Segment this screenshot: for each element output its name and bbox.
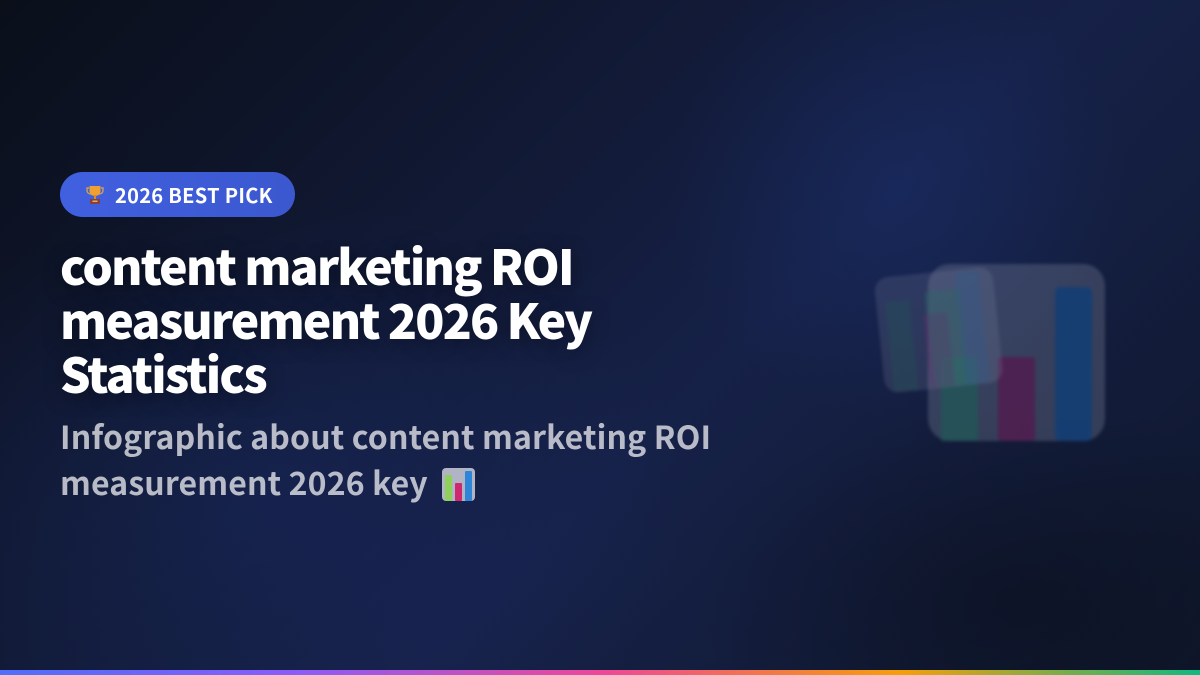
badge — [60, 172, 295, 217]
title: Statistics — [60, 337, 266, 407]
subtitle: measurement 2026 key — [60, 459, 428, 505]
small tilted chart tile — [873, 266, 1004, 394]
title — [60, 229, 592, 407]
rainbow accent bar — [0, 670, 1200, 675]
icon: bar chart — [442, 468, 475, 501]
subtitle: Infographic about content marketing ROI — [60, 413, 711, 459]
large chart tile — [928, 264, 1105, 441]
title: content marketing ROI — [60, 229, 573, 299]
badge label: 2026 BEST PICK — [115, 180, 273, 209]
decorative chart icon, blurred — [874, 263, 1106, 442]
title: measurement 2026 Key — [60, 283, 591, 353]
subtitle — [60, 413, 711, 505]
icon: trophy — [86, 186, 104, 204]
